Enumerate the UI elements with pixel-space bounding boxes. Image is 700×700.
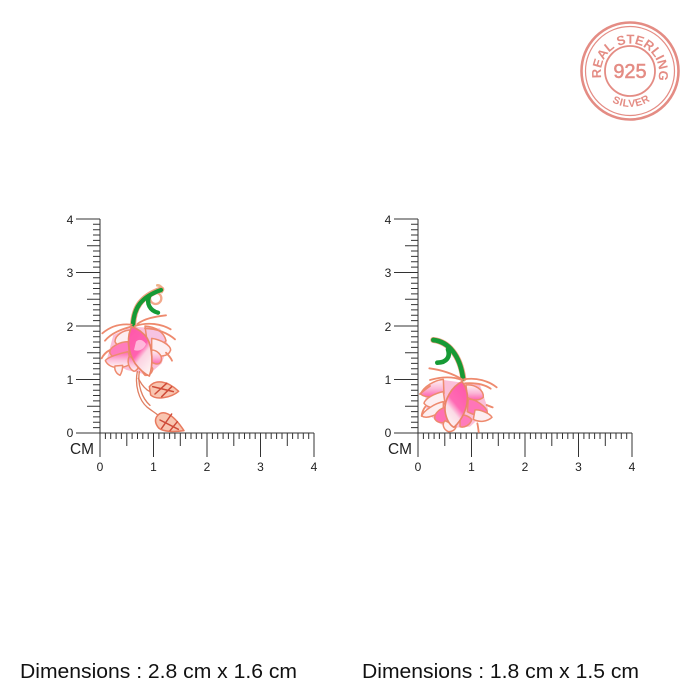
left y-axis labels: 0 (67, 426, 74, 440)
left y-axis labels: 1 (67, 373, 74, 387)
right y-axis labels: 4 (385, 213, 392, 227)
right ruler chart (385, 213, 636, 474)
left y-axis labels: 3 (67, 266, 74, 280)
right y-axis labels: 2 (385, 320, 392, 334)
left earring flower stems (137, 372, 158, 415)
left y-axis labels: 2 (67, 320, 74, 334)
left earring back petals (105, 326, 171, 375)
right y-axis labels (385, 213, 392, 440)
left earring central petal (129, 327, 152, 376)
right x-axis labels: 2 (522, 460, 529, 474)
badge text: 925: 925 (613, 61, 647, 83)
right y-axis labels: 0 (385, 426, 392, 440)
left dimensions caption: Dimensions : 2.8 cm x 1.6 cm (20, 661, 297, 683)
left earring flower base (107, 327, 168, 375)
right y-axis labels: 3 (385, 266, 392, 280)
left earring wire sepals (102, 315, 175, 361)
right earring hook and stem (433, 340, 463, 379)
badge text: silver: SILVER (612, 96, 650, 107)
right dimensions caption: Dimensions : 1.8 cm x 1.5 cm (362, 661, 639, 683)
right x-axis labels: 1 (468, 460, 475, 474)
left x-axis labels: 1 (150, 460, 157, 474)
left x-axis labels: 0 (97, 460, 104, 474)
right unit label: CM (388, 441, 412, 458)
right y-axis labels: 1 (385, 373, 392, 387)
right earring back petals (421, 379, 492, 432)
left earring hook and stem (133, 285, 162, 325)
left x-axis labels: 4 (311, 460, 318, 474)
badge text: real sterling: REAL STERLING (592, 34, 668, 80)
right x-axis labels: 0 (415, 460, 422, 474)
left earring: lotus with buds (102, 285, 184, 431)
right earring central petal (445, 382, 467, 427)
left y-axis labels (67, 213, 74, 440)
badge: real sterling silver 925 (580, 21, 680, 121)
right x-axis labels: 4 (629, 460, 636, 474)
right x-axis labels: 3 (575, 460, 582, 474)
left earring lower bud (156, 413, 184, 431)
left x-axis labels (97, 460, 318, 474)
left x-axis labels: 3 (257, 460, 264, 474)
right earring flower base (425, 380, 488, 428)
right earring: lotus (420, 340, 497, 432)
left x-axis labels: 2 (204, 460, 211, 474)
left earring upper bud (149, 382, 179, 398)
right earring wire sepals (420, 368, 497, 432)
left unit label: CM (70, 441, 94, 458)
right x-axis labels (415, 460, 636, 474)
left ruler chart (67, 213, 318, 474)
left y-axis labels: 4 (67, 213, 74, 227)
